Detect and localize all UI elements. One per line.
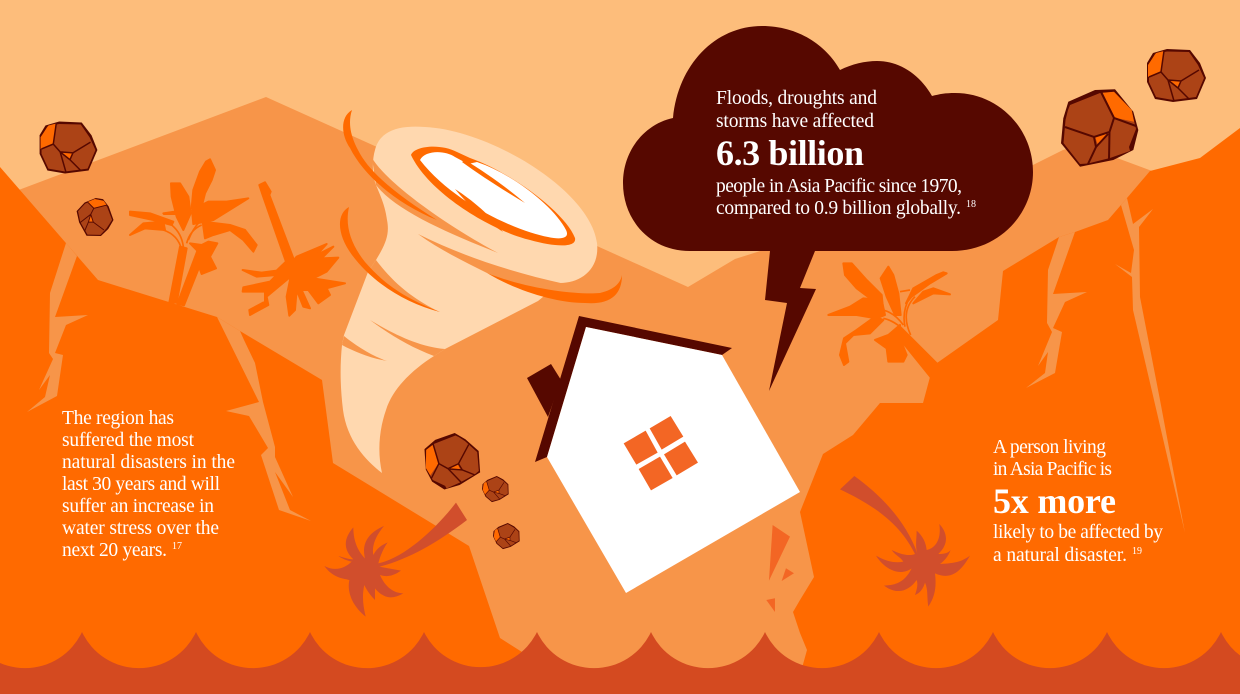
- house wall: [547, 327, 800, 593]
- icon: boulder small left: [73, 195, 118, 242]
- text: left paragraph: suffered the most: [62, 430, 195, 451]
- icon: small boulder two: [490, 520, 524, 552]
- text: left paragraph: [62, 408, 235, 561]
- text: cloud statistic: people in Asia Pacific since 1970,: [716, 176, 962, 197]
- tornado: [340, 110, 622, 473]
- debris shards: [766, 525, 794, 612]
- icon: boulder near tornado: [412, 423, 490, 501]
- text: cloud statistic: Floods, droughts and: [716, 88, 877, 109]
- text: right statistic: in Asia Pacific is: [993, 459, 1112, 480]
- icon: fallen tree left: [243, 182, 345, 316]
- text: left paragraph: suffer an increase in: [62, 496, 214, 517]
- icon: palm tree left: [324, 503, 467, 617]
- flood waves: [0, 632, 1240, 694]
- house roof: [535, 316, 732, 462]
- house window: [624, 416, 698, 490]
- text: cloud statistic: storms have affected: [716, 111, 874, 132]
- text: right statistic: 19: [1132, 546, 1142, 557]
- icon: boulder top right: [1147, 49, 1206, 102]
- icon: small boulder one: [479, 473, 513, 505]
- text: left paragraph: 17: [172, 541, 182, 552]
- text: cloud statistic: [716, 88, 976, 219]
- text: left paragraph: next 20 years.: [62, 540, 167, 561]
- left orange cliff: [0, 167, 560, 694]
- icon: uprooted banana tree left: [130, 159, 257, 305]
- icon: boulder large right: [1061, 89, 1138, 167]
- tornado orange swooshes: [340, 110, 622, 312]
- icon: boulder top left: [40, 122, 97, 173]
- house: [527, 316, 800, 593]
- text: right statistic: a natural disaster.: [993, 545, 1127, 566]
- text: right statistic: 5x more: [993, 481, 1116, 521]
- text: left paragraph: The region has: [62, 408, 174, 429]
- tornado eye: [411, 147, 575, 245]
- right cliff crack two: [1115, 198, 1185, 533]
- house chimney: [527, 364, 561, 417]
- text: cloud statistic: 6.3 billion: [716, 133, 864, 173]
- text: left paragraph: water stress over the: [62, 518, 219, 539]
- right cliff crack one: [1026, 232, 1087, 388]
- text: right statistic: likely to be affected by: [993, 522, 1163, 543]
- text: right statistic: [993, 437, 1163, 566]
- icon: palm tree right: [840, 476, 970, 607]
- middle left cliff crack: [217, 317, 311, 521]
- icon: uprooted banana tree right: [828, 263, 950, 378]
- left cliff crack: [27, 243, 88, 412]
- right orange cliff: [793, 128, 1240, 694]
- text: left paragraph: natural disasters in the: [62, 452, 235, 473]
- text: right statistic: A person living: [993, 437, 1106, 458]
- text: cloud statistic: compared to 0.9 billion globally.: [716, 198, 961, 219]
- speech cloud: [623, 26, 1033, 391]
- text: left paragraph: last 30 years and will: [62, 474, 221, 495]
- text: cloud statistic: 18: [966, 199, 976, 210]
